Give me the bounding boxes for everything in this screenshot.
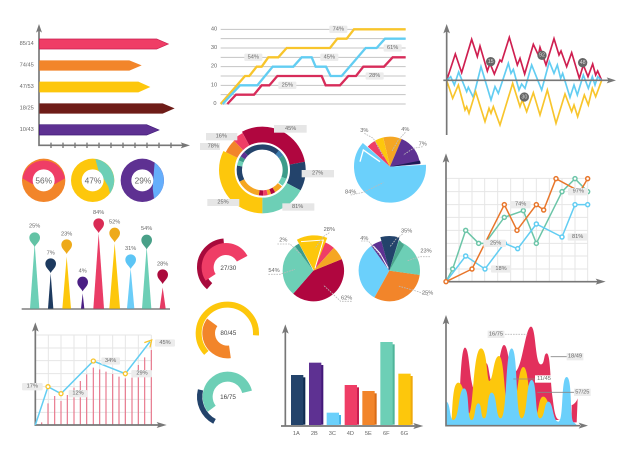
label 81%: 81% — [292, 204, 303, 210]
label 74%: 74% — [515, 202, 526, 208]
bar 47/53: 47/53 — [20, 84, 34, 90]
label 18% — [491, 265, 511, 273]
label 25%: 25% — [282, 82, 293, 88]
bar chart axes — [281, 324, 423, 429]
chart: pin spikes — [22, 210, 170, 309]
label 23%: 23% — [420, 249, 432, 255]
label 4%: 4% — [360, 236, 368, 242]
blue area — [446, 348, 577, 426]
label 54%: 54% — [248, 54, 259, 60]
chart: line over red bars — [22, 322, 175, 428]
spike 25% — [29, 224, 40, 309]
spike 84% — [93, 210, 104, 309]
callout 16/75: 16/75 — [489, 331, 503, 337]
baseline — [22, 307, 170, 311]
label 2%: 2% — [279, 238, 287, 244]
label 84%: 84% — [345, 190, 356, 196]
grid lines — [221, 29, 406, 95]
red line — [227, 57, 406, 104]
gauge 80/45 — [187, 293, 268, 374]
label 25% — [483, 240, 506, 247]
label 97%: 97% — [573, 189, 584, 195]
callout 57/25 — [537, 389, 591, 396]
red area — [458, 327, 578, 422]
chart: horizontal arrow bars — [20, 24, 190, 202]
label 45% — [320, 54, 338, 61]
chart: gauges and bar chart row — [187, 293, 423, 437]
label 45%: 45% — [159, 340, 171, 346]
axes — [443, 315, 588, 429]
spike 28% — [157, 262, 168, 309]
y axis labels — [211, 26, 217, 107]
spike 7% — [45, 250, 56, 309]
white separator ring — [235, 143, 289, 197]
label 25%: 25% — [217, 199, 229, 205]
bar 85/14: 85/14 — [20, 41, 34, 47]
label 45% — [155, 339, 175, 347]
bar 85/14 — [20, 39, 168, 49]
spike 52%: 52% — [109, 219, 120, 225]
y axis labels: 20 — [211, 64, 217, 70]
label 78%: 78% — [208, 144, 219, 150]
bar 6G — [398, 374, 413, 437]
spike 23% — [61, 231, 72, 309]
gauge 16/75 — [190, 359, 266, 435]
label 97% — [568, 188, 588, 195]
axes — [443, 24, 616, 135]
label 7%: 7% — [419, 141, 427, 147]
label 34%: 34% — [105, 358, 116, 364]
label 45%: 45% — [285, 126, 296, 132]
label 54%: 54% — [268, 268, 280, 274]
badge 30: 30 — [521, 94, 527, 100]
axes — [32, 322, 167, 428]
label 4%: 4% — [401, 127, 409, 133]
callout 18/49 — [551, 353, 583, 360]
chart: stepped line chart — [211, 26, 406, 107]
y axis labels: 10 — [211, 82, 217, 88]
spike 4%: 4% — [79, 269, 87, 275]
bar 18/25: 18/25 — [20, 105, 34, 111]
spike 84%: 84% — [93, 210, 104, 216]
label 81%: 81% — [572, 234, 583, 240]
spike 31%: 31% — [125, 246, 136, 252]
gauge 27/30 — [191, 232, 261, 303]
spike 4% — [77, 269, 88, 309]
gauge 16/75: 16/75 — [220, 394, 236, 401]
badge 48: 48 — [580, 60, 586, 66]
yellow line — [221, 29, 406, 104]
donut 56% — [22, 159, 65, 202]
spike 25%: 25% — [29, 224, 40, 230]
label 27% — [302, 170, 334, 177]
label 62%: 62% — [341, 296, 352, 302]
orange series — [444, 177, 590, 284]
label 28%: 28% — [324, 227, 335, 233]
grid — [35, 335, 151, 425]
blue line — [223, 39, 406, 104]
y axis labels: 40 — [211, 26, 217, 32]
bar 74/45: 74/45 — [20, 62, 34, 68]
outer ring segments — [213, 121, 311, 219]
label 25%: 25% — [490, 240, 501, 246]
bar 74/45 — [20, 60, 142, 71]
pie 35% — [361, 234, 430, 296]
label 74% — [329, 26, 347, 33]
label 81% — [282, 203, 314, 211]
red zigzag — [447, 37, 602, 80]
label 25% — [207, 199, 239, 206]
red bars — [42, 350, 151, 425]
bar 2B: 2B — [311, 431, 318, 437]
donut 47% — [71, 159, 114, 202]
label 28%: 28% — [369, 73, 380, 79]
spike 54%: 54% — [141, 226, 152, 232]
label 12%: 12% — [72, 391, 84, 397]
baseline — [221, 101, 406, 106]
pie 84% — [351, 132, 423, 195]
donut 47%: 47% — [85, 176, 102, 186]
label 61% — [384, 44, 402, 52]
spike 7%: 7% — [47, 250, 55, 256]
label 27%: 27% — [312, 171, 323, 177]
spike 52% — [109, 219, 120, 309]
badge 15 — [486, 57, 495, 66]
donut 56%: 56% — [35, 176, 53, 186]
y axis labels: 0 — [213, 101, 217, 107]
bar 3C: 3C — [329, 431, 336, 437]
label 34% — [101, 357, 120, 365]
yellow markers — [46, 340, 152, 396]
label 45%: 45% — [324, 54, 335, 60]
bar 5E — [362, 391, 377, 437]
label 81% — [568, 233, 588, 241]
pie 62% — [268, 233, 352, 301]
label 45% — [274, 125, 307, 133]
label 16% — [206, 133, 237, 140]
bar 4D: 4D — [347, 431, 354, 437]
label 17%: 17% — [27, 384, 38, 390]
bar 2B — [309, 363, 323, 437]
callout 11/45 — [513, 375, 554, 383]
spike 23%: 23% — [61, 231, 72, 237]
label 61%: 61% — [387, 45, 398, 51]
grid — [446, 178, 588, 282]
bar 10/43: 10/43 — [20, 127, 34, 133]
yellow zigzag — [447, 80, 602, 125]
label 74% — [510, 201, 531, 208]
label 25%: 25% — [422, 290, 433, 296]
bar 1A — [291, 375, 305, 437]
gauge 80/45: 80/45 — [220, 330, 237, 337]
label 29% — [131, 370, 152, 377]
callout 16/75 — [488, 331, 527, 338]
bar 4D — [345, 385, 359, 437]
bar 5E: 5E — [365, 431, 372, 437]
label 29%: 29% — [136, 371, 148, 377]
callout 57/25: 57/25 — [575, 389, 589, 395]
bar 47/53 — [20, 82, 150, 92]
axes — [443, 153, 606, 285]
teal series — [446, 177, 590, 282]
badge 15: 15 — [488, 59, 494, 65]
badge 92: 92 — [539, 53, 545, 59]
bar 6F — [380, 342, 395, 437]
badge 92 — [537, 51, 547, 60]
spike 28%: 28% — [157, 262, 168, 268]
bar 6G: 6G — [401, 431, 408, 437]
chart: multi-ring donut — [200, 121, 427, 219]
label 18%: 18% — [495, 266, 507, 272]
label 17% — [22, 383, 43, 390]
bar 3C — [327, 413, 341, 437]
label 28% — [366, 72, 384, 80]
bar 6F: 6F — [383, 431, 390, 437]
bar 10/43 — [20, 125, 159, 135]
label 25% — [278, 82, 296, 89]
spike 31% — [125, 246, 136, 309]
spike 54% — [141, 226, 152, 309]
chart: gauges and pies row — [191, 227, 433, 303]
label 16%: 16% — [216, 134, 227, 140]
callout 18/49: 18/49 — [568, 354, 582, 360]
bar 1A: 1A — [293, 431, 300, 437]
gauge 27/30: 27/30 — [220, 265, 237, 272]
blue series — [446, 203, 590, 282]
yellow area — [452, 348, 558, 422]
chart: line chart with markers — [443, 153, 606, 285]
label 54% — [244, 54, 262, 61]
inner ring segments — [230, 137, 295, 203]
axes — [36, 24, 190, 148]
donut 29%: 29% — [135, 176, 152, 186]
chart: zigzag lines — [443, 24, 616, 135]
badge 48 — [578, 58, 587, 67]
label 74%: 74% — [333, 26, 344, 32]
label 3%: 3% — [360, 128, 368, 134]
donut 29% — [121, 159, 164, 202]
blue zigzag — [447, 62, 602, 100]
bar 18/25 — [20, 103, 175, 114]
chart: layered area — [443, 315, 591, 429]
label 35%: 35% — [401, 228, 412, 234]
blue trend line — [35, 342, 150, 425]
label 78% — [200, 143, 220, 150]
callout 11/45: 11/45 — [537, 376, 551, 382]
label 12% — [69, 390, 87, 397]
y axis labels: 30 — [211, 45, 217, 51]
badge 30 — [520, 92, 529, 102]
